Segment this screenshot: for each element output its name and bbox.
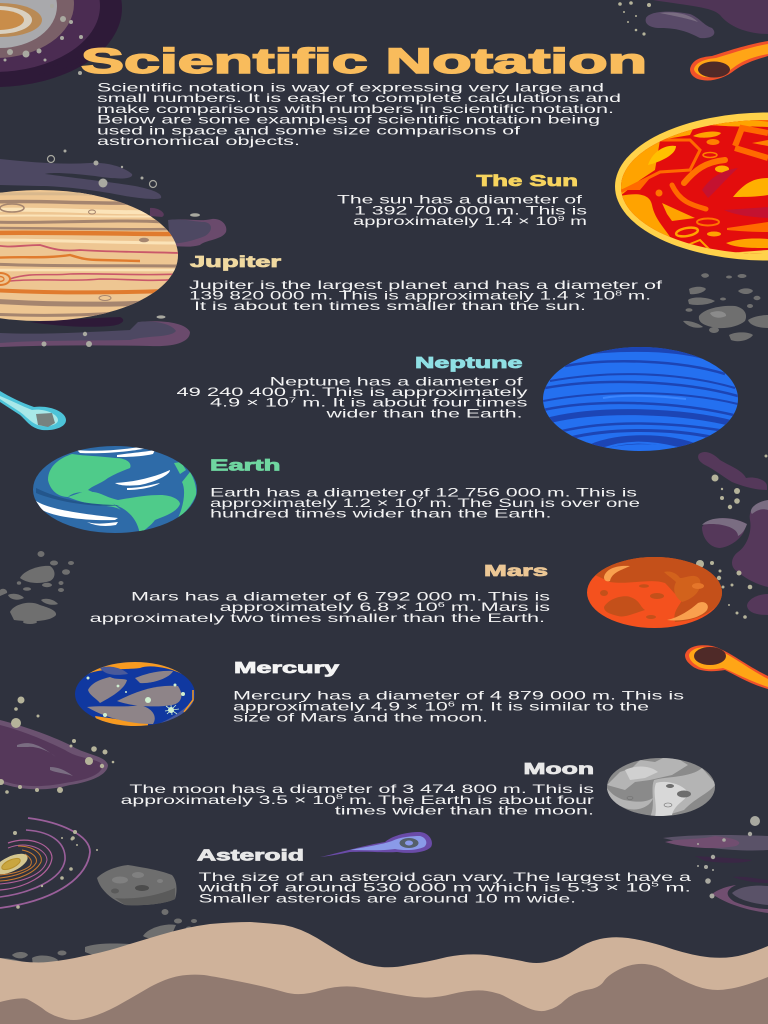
intro text: Scientific notation is way of expressing very large and [97, 82, 604, 94]
icon: cloud bottom right [663, 816, 768, 913]
heading: asteroid: Asteroid [197, 848, 304, 865]
text: earth: Earth has a diameter of 12 756 000 m. This is [210, 486, 637, 499]
ground: brown dunes [0, 964, 768, 1024]
text: the sun: approximately 1.4 × 10 [353, 215, 471, 228]
text: neptune [176, 375, 528, 420]
intro text: make comparisons with numbers in scientific notation. [97, 103, 614, 116]
icon: large asteroid [97, 865, 177, 905]
text: the sun: 1 392 700 000 m. This is [354, 204, 587, 217]
text: mars [90, 590, 550, 625]
heading: neptune: Neptune [415, 355, 523, 372]
icon: purple rock left [0, 696, 114, 794]
text: moon: times wider than the moon. [335, 805, 594, 818]
planet: moon [607, 757, 716, 817]
text: mercury: m. It is similar to the [455, 701, 649, 714]
text: earth: hundred times wider than the Earth. [210, 508, 552, 521]
text: jupiter: 139 820 000 m. This is approximately 1.4 × 10 [189, 290, 427, 303]
text: asteroid: The size of an asteroid can vary. The largest have a [198, 871, 692, 884]
text: jupiter: It is about ten times smaller than the sun. [194, 300, 586, 313]
heading: mars: Mars [484, 563, 548, 580]
text: mars: approximately 6.8 × 10 [220, 601, 337, 614]
icon: cloud right [696, 452, 768, 619]
intro text: used in space and some size comparisons of [97, 124, 521, 137]
planet: sun [615, 110, 768, 260]
text: asteroid: Smaller asteroids are around 10 m wide. [198, 892, 576, 905]
text: mercury: Mercury has a diameter of 4 879 000 m. This is [233, 689, 684, 702]
intro text: small numbers. It is easier to complete calculations and [97, 92, 621, 105]
text: neptune: wider than the Earth. [325, 407, 522, 420]
planet: earth [33, 446, 197, 535]
icon: spiral galaxy [0, 818, 98, 909]
text: neptune: 7 [289, 398, 296, 405]
text: the sun: The sun has a diameter of [337, 194, 583, 207]
text: moon: The moon has a diameter of 3 474 800 m. This is [129, 783, 594, 796]
text: mars: Mars has a diameter of 6 792 000 m. This is [131, 590, 550, 603]
icon: comet purple [320, 832, 432, 857]
planet: neptune [543, 347, 738, 452]
text: earth [210, 486, 640, 521]
text: asteroid: 5 [651, 882, 659, 889]
text: neptune: m. It is about four times [296, 397, 528, 410]
text: neptune: 4.9 × 10 [210, 397, 252, 410]
intro text: Below are some examples of scientific notation being [97, 114, 600, 126]
icon: asteroid field right [683, 273, 768, 341]
text: mercury [233, 689, 684, 724]
text: jupiter [189, 279, 663, 313]
cloud: behind jupiter [0, 150, 226, 347]
text: mars: 6 [438, 602, 445, 609]
text: the sun [337, 194, 587, 228]
planet: mercury [75, 662, 195, 726]
icon: comet teal [0, 391, 66, 430]
heading: jupiter: Jupiter [190, 254, 281, 271]
icon: rocks left [0, 551, 74, 624]
planet: jupiter [0, 190, 180, 321]
intro text: astronomical objects. [97, 135, 300, 148]
text: neptune: Neptune has a diameter of [270, 375, 524, 388]
text: the sun: 9 [558, 216, 565, 223]
heading: moon: Moon [524, 761, 594, 778]
text: earth: m. The Sun is over one [424, 497, 640, 510]
text: neptune: 49 240 400 m. This is approximately [176, 386, 528, 399]
text: earth: approximately 1.2 × 10 [210, 497, 328, 510]
text: jupiter: Jupiter is the largest planet and has a diameter of [189, 279, 663, 292]
cloud: top right [618, 0, 768, 38]
icon: comet right [685, 645, 768, 689]
icon: rocks bottom left [0, 909, 197, 966]
title: Scientific Notation [81, 42, 647, 81]
text: jupiter: m. [622, 290, 651, 303]
text: mars: approximately two times smaller than the Earth. [90, 612, 545, 625]
text: moon: m. The Earth is about four [343, 794, 594, 807]
text: asteroid: m. [659, 882, 691, 895]
text: earth: 7 [417, 497, 424, 504]
intro text [97, 82, 621, 148]
text: moon [121, 783, 594, 818]
heading: mercury: Mercury [234, 660, 339, 677]
icon: comet top right [690, 41, 768, 81]
text: the sun: m [565, 215, 587, 228]
heading: the sun: The Sun [476, 173, 578, 190]
text: jupiter: 8 [615, 291, 622, 298]
text: mars: m. Mars is [445, 601, 550, 614]
text: asteroid [197, 871, 692, 905]
text: mercury: approximately 4.9 × 10 [233, 701, 351, 714]
text: mercury: size of Mars and the moon. [233, 711, 488, 724]
text: moon: approximately 3.5 × 10 [121, 794, 238, 807]
text: asteroid: width of around 530 000 m which is 5.3 × 10 [198, 882, 426, 895]
planet: mars [587, 554, 724, 628]
text: mercury: 6 [448, 702, 455, 709]
heading: earth: Earth [210, 458, 280, 475]
ground: tan dunes [0, 922, 768, 1024]
text: moon: 8 [336, 794, 343, 801]
galaxy: top left [0, 0, 122, 87]
